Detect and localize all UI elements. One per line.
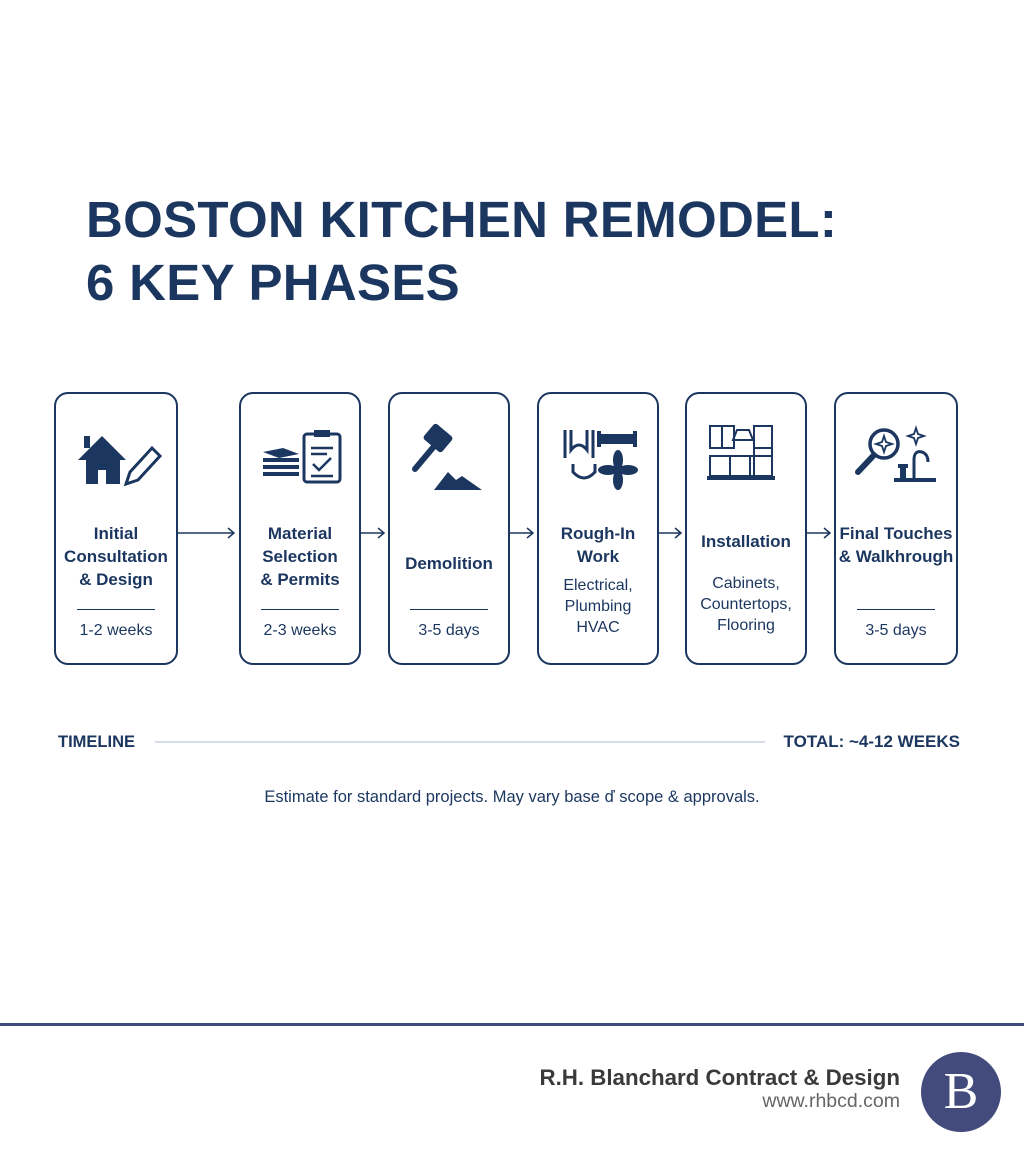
card 3: demolition	[388, 392, 510, 665]
icon: hammer and rubble	[412, 424, 482, 490]
card 6: final touches	[834, 392, 958, 665]
icon: pipes and fan	[564, 430, 638, 490]
company name: R.H. Blanchard Contract & Design	[539, 1065, 900, 1090]
details: HVAC	[576, 619, 620, 636]
heading	[260, 524, 340, 589]
heading	[64, 524, 168, 589]
url: www.rhbcd.com	[762, 1090, 900, 1112]
arrow	[807, 528, 832, 539]
details: Plumbing	[565, 598, 631, 615]
title: BOSTON KITCHEN REMODEL:	[86, 191, 837, 248]
details	[700, 575, 792, 634]
details: Electrical,	[563, 577, 633, 594]
heading: Initial	[94, 524, 138, 543]
arrow	[659, 528, 682, 539]
heading: Final Touches	[839, 524, 953, 543]
heading	[839, 524, 953, 566]
icon: materials and clipboard	[263, 430, 342, 484]
duration: 2-3 weeks	[264, 622, 336, 639]
duration: 3-5 days	[865, 622, 927, 639]
details: Flooring	[717, 617, 775, 634]
details: Cabinets,	[712, 575, 780, 592]
arrow	[178, 528, 236, 539]
arrow	[510, 528, 534, 539]
card 2: materials	[239, 392, 361, 665]
title	[86, 191, 837, 311]
timeline	[58, 732, 960, 751]
icon: kitchen cabinets	[707, 425, 775, 480]
logo: B	[944, 1063, 978, 1120]
icon: magnifier and faucet	[855, 425, 936, 482]
footer brand	[539, 1052, 1001, 1132]
footnote: Estimate for standard projects. May vary base ď scope & approvals.	[264, 788, 760, 806]
details: Countertops,	[700, 596, 792, 613]
card 1: consultation	[54, 392, 178, 665]
icon: house and pencil	[78, 436, 162, 486]
heading: Consultation	[64, 547, 168, 566]
total label: TOTAL: ~4-12 WEEKS	[784, 732, 960, 751]
heading: Rough-In	[561, 524, 635, 543]
duration: 1-2 weeks	[80, 622, 152, 639]
heading: Material	[268, 524, 332, 543]
logo	[921, 1052, 1001, 1132]
card 4: rough-in	[537, 392, 659, 665]
details	[563, 577, 633, 636]
heading	[561, 524, 635, 566]
card 5: installation	[685, 392, 807, 665]
heading: & Walkhrough	[839, 547, 953, 566]
heading: & Permits	[260, 570, 340, 589]
timeline label: TIMELINE	[58, 733, 135, 751]
duration: 3-5 days	[418, 622, 480, 639]
title: 6 KEY PHASES	[86, 254, 460, 311]
heading: Demolition	[405, 554, 493, 573]
heading: Selection	[262, 547, 338, 566]
heading: Installation	[701, 532, 791, 551]
heading: & Design	[79, 570, 153, 589]
heading: Work	[577, 547, 619, 566]
arrow	[361, 528, 386, 539]
